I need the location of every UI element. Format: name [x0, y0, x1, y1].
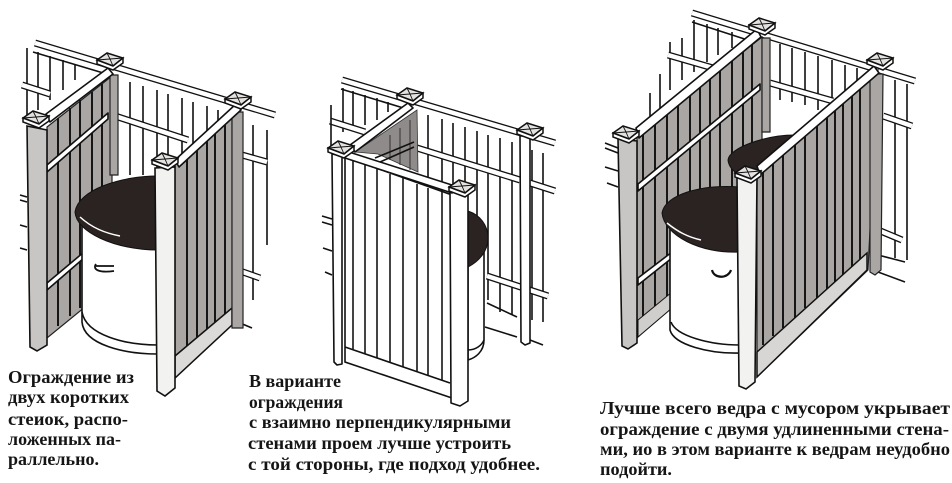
- caption 2: стенами проем лучше устроить: [248, 433, 511, 453]
- handle: [95, 264, 114, 272]
- back posts 2: [517, 123, 543, 345]
- caption 1: раллельно.: [8, 449, 99, 469]
- caption 3: ограждение с двумя удлиненными стена-: [600, 419, 949, 439]
- caption 1: [8, 367, 134, 469]
- right wall 1: [175, 108, 243, 378]
- handle: [712, 270, 731, 277]
- left wall 1: [47, 75, 118, 338]
- background fence 3: [605, 13, 915, 282]
- caption 1: ложенных па-: [8, 429, 121, 449]
- caption 2: В варианте: [249, 371, 341, 391]
- figure 1: two short parallel walls: [20, 43, 275, 396]
- caption 3: подойти.: [600, 459, 672, 479]
- bin 1: [75, 176, 158, 354]
- caption 1: стеиок, распо-: [8, 409, 128, 429]
- posts and top rails 3: [613, 18, 893, 389]
- caption 2: [248, 371, 540, 474]
- background fence 1: [20, 43, 275, 328]
- front bin 3: [662, 187, 740, 353]
- right wall 3: [757, 70, 883, 377]
- figure 2: perpendicular walls: [322, 80, 555, 406]
- back bin 3: [728, 135, 795, 180]
- left wall 3: [637, 37, 770, 338]
- caption 2: с взаимно перпендикулярными: [249, 412, 511, 432]
- figure 3: two long parallel walls: [605, 13, 915, 389]
- shaded inner wall 2: [355, 110, 418, 172]
- caption 1: Ограждение из: [8, 367, 134, 387]
- caption 1: двух коротких: [8, 387, 129, 407]
- background fence 2: [322, 80, 555, 345]
- caption 2: с той стороны, где подход удобнее.: [248, 454, 540, 474]
- posts and top rails 1: [23, 53, 251, 396]
- caption 3: [600, 398, 950, 479]
- caption 3: ми, ио в этом варианте к ведрам неудобно: [600, 439, 950, 459]
- caption 3: Лучше всего ведра с мусором укрывает: [600, 398, 950, 418]
- bin 2: [468, 211, 488, 360]
- front wall 2: [345, 157, 452, 398]
- front posts and rails 2: [328, 88, 475, 406]
- caption 2: ограждения: [249, 392, 343, 412]
